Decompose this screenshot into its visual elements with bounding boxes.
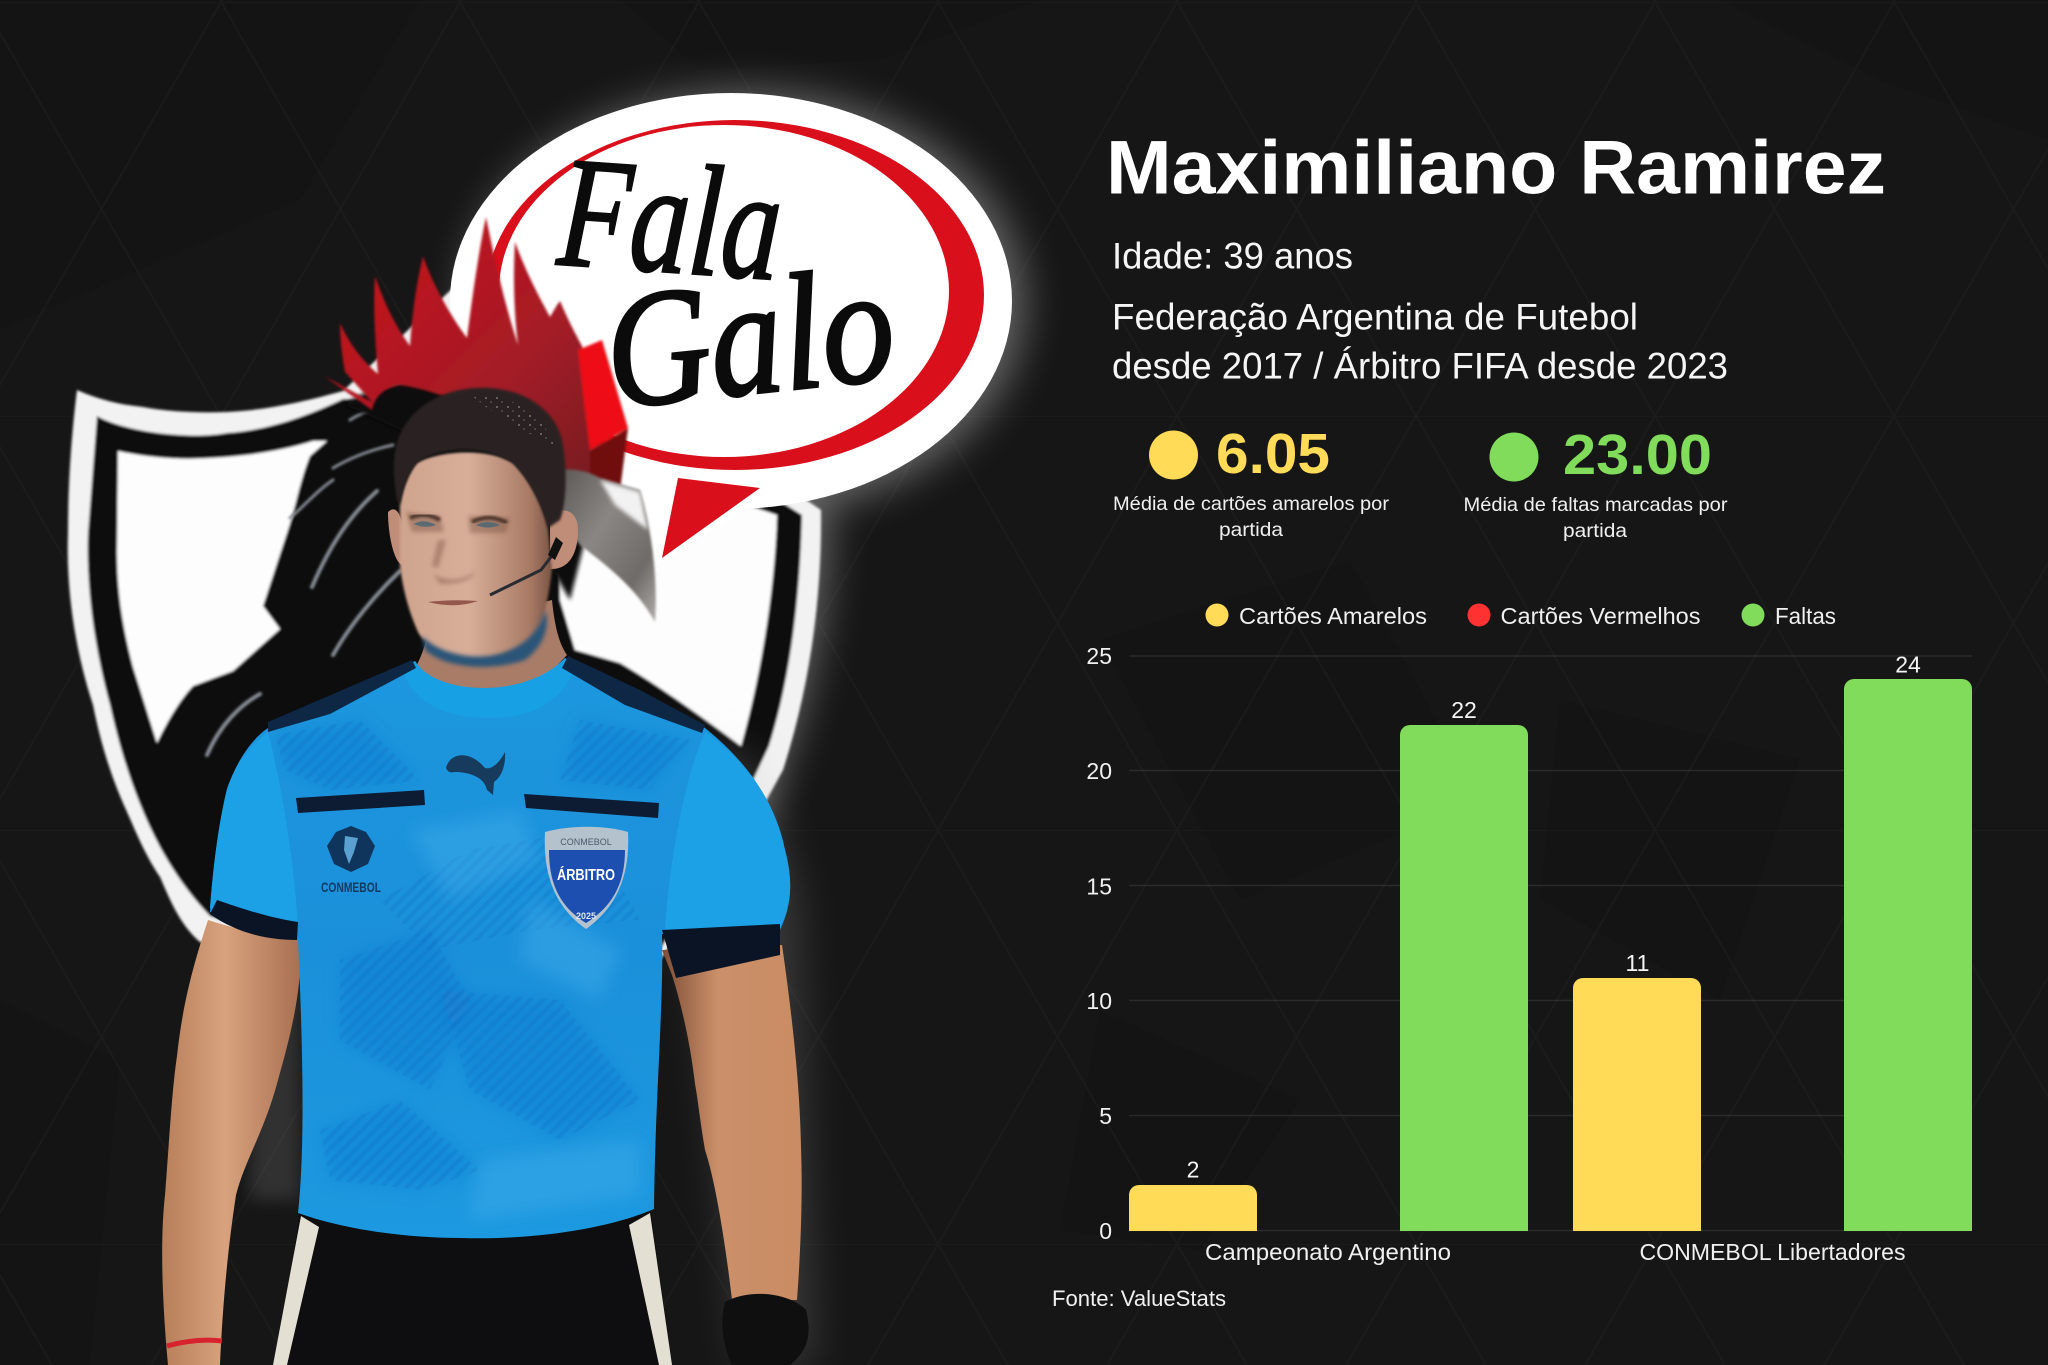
value labels: 11 [1626,950,1649,976]
logo: Fala Galo shield and speech bubble [68,91,1025,960]
shorts [273,1205,672,1365]
y axis labels: 0 [1099,1218,1112,1244]
beak highlight [600,480,648,530]
referee details text: Idade: 39 anos [1112,236,1353,276]
icon: arbitro badge [545,827,628,929]
rooster comb [324,217,628,500]
sleeve cuffs [210,900,780,978]
stat: yellow cards average: Média de cartões amarelos por [1113,493,1390,515]
jaw shadow [422,610,547,667]
left arm [162,920,301,1365]
stat: fouls average [1464,423,1728,542]
shield [68,272,821,960]
y axis labels [1086,643,1112,1244]
y axis labels: 15 [1086,874,1112,900]
shirt soft shading [275,720,690,1190]
underarm haze [250,960,300,1200]
collar [402,658,575,718]
icon: conmebol emblem [321,826,381,895]
chest card pockets [296,790,659,818]
value labels [1187,652,1921,1182]
wristband [722,1294,809,1365]
eyebrows and eyes [410,515,507,523]
bar chart [1086,643,1972,1265]
neck [415,600,567,710]
chart legend: Cartões Vermelhos [1500,603,1700,629]
category labels [1205,1239,1906,1265]
hair shine [470,394,555,445]
y axis labels: 5 [1099,1103,1112,1129]
bars [1129,679,1972,1231]
stat: yellow cards average [1113,422,1390,541]
stat: fouls average: partida [1563,520,1627,542]
right arm [662,945,802,1300]
shirt [210,656,790,1238]
y axis labels: 10 [1086,988,1112,1014]
shield black band and rooster body [88,399,802,950]
value labels: 2 [1187,1156,1199,1182]
mouth [428,600,478,605]
chart legend: Cartões Amarelos [1239,603,1427,629]
red bracelet [167,1340,222,1346]
icon: conmebol emblem: CONMEBOL [321,879,381,895]
stat: fouls average: Média de faltas marcadas por [1464,494,1728,516]
icon: green dot [1490,432,1538,482]
icon: arbitro badge: ÁRBITRO [557,865,615,884]
shield interior right [560,420,777,746]
rooster crown dark feathers [345,379,590,600]
value labels: 22 [1451,697,1477,723]
value labels: 24 [1895,652,1921,678]
chart legend [1206,603,1836,629]
y axis labels: 25 [1086,643,1112,669]
title: Maximiliano Ramirez [1106,126,1886,210]
logo glow [465,91,1025,900]
speech bubble [450,93,1012,570]
referee details text: Federação Argentina de Futebol [1112,296,1638,338]
rooster beak [560,469,656,622]
referee photo [162,388,815,1365]
face [400,452,552,660]
ears [388,509,578,569]
grid lines [1129,656,1972,1230]
referee details text: desde 2017 / Árbitro FIFA desde 2023 [1112,346,1728,386]
stat: fouls average: 23.00 [1563,423,1712,487]
referee glow [640,720,815,1365]
rooster head [324,217,656,622]
y axis labels: 20 [1086,758,1112,784]
shirt texture [275,720,690,1190]
chart legend: Faltas [1775,603,1836,629]
headset [490,545,560,595]
stat: yellow cards average: partida [1219,519,1283,541]
source note: Fonte: ValueStats [1052,1286,1226,1311]
sleeves [210,732,790,932]
head [388,388,578,667]
icon: arbitro badge: 2025 [576,911,596,921]
hair [394,388,566,528]
rooster feather highlights [207,402,405,755]
icon: arbitro badge: CONMEBOL [560,837,612,847]
face shadows [406,512,510,584]
icon: yellow dot [1149,430,1198,480]
shirt highlights [410,810,640,1220]
icon: puma logo [446,752,505,795]
wordmark: Galo: Galo [597,231,902,444]
shoulder stripes [268,656,705,733]
shield white outline [68,272,821,960]
referee details text [1112,236,1728,386]
stat: yellow cards average: 6.05 [1216,422,1330,486]
category labels: Campeonato Argentino [1205,1239,1451,1265]
shield interior left [117,441,327,743]
category labels: CONMEBOL Libertadores [1640,1239,1906,1265]
wordmark: Fala: Fala [553,124,787,314]
